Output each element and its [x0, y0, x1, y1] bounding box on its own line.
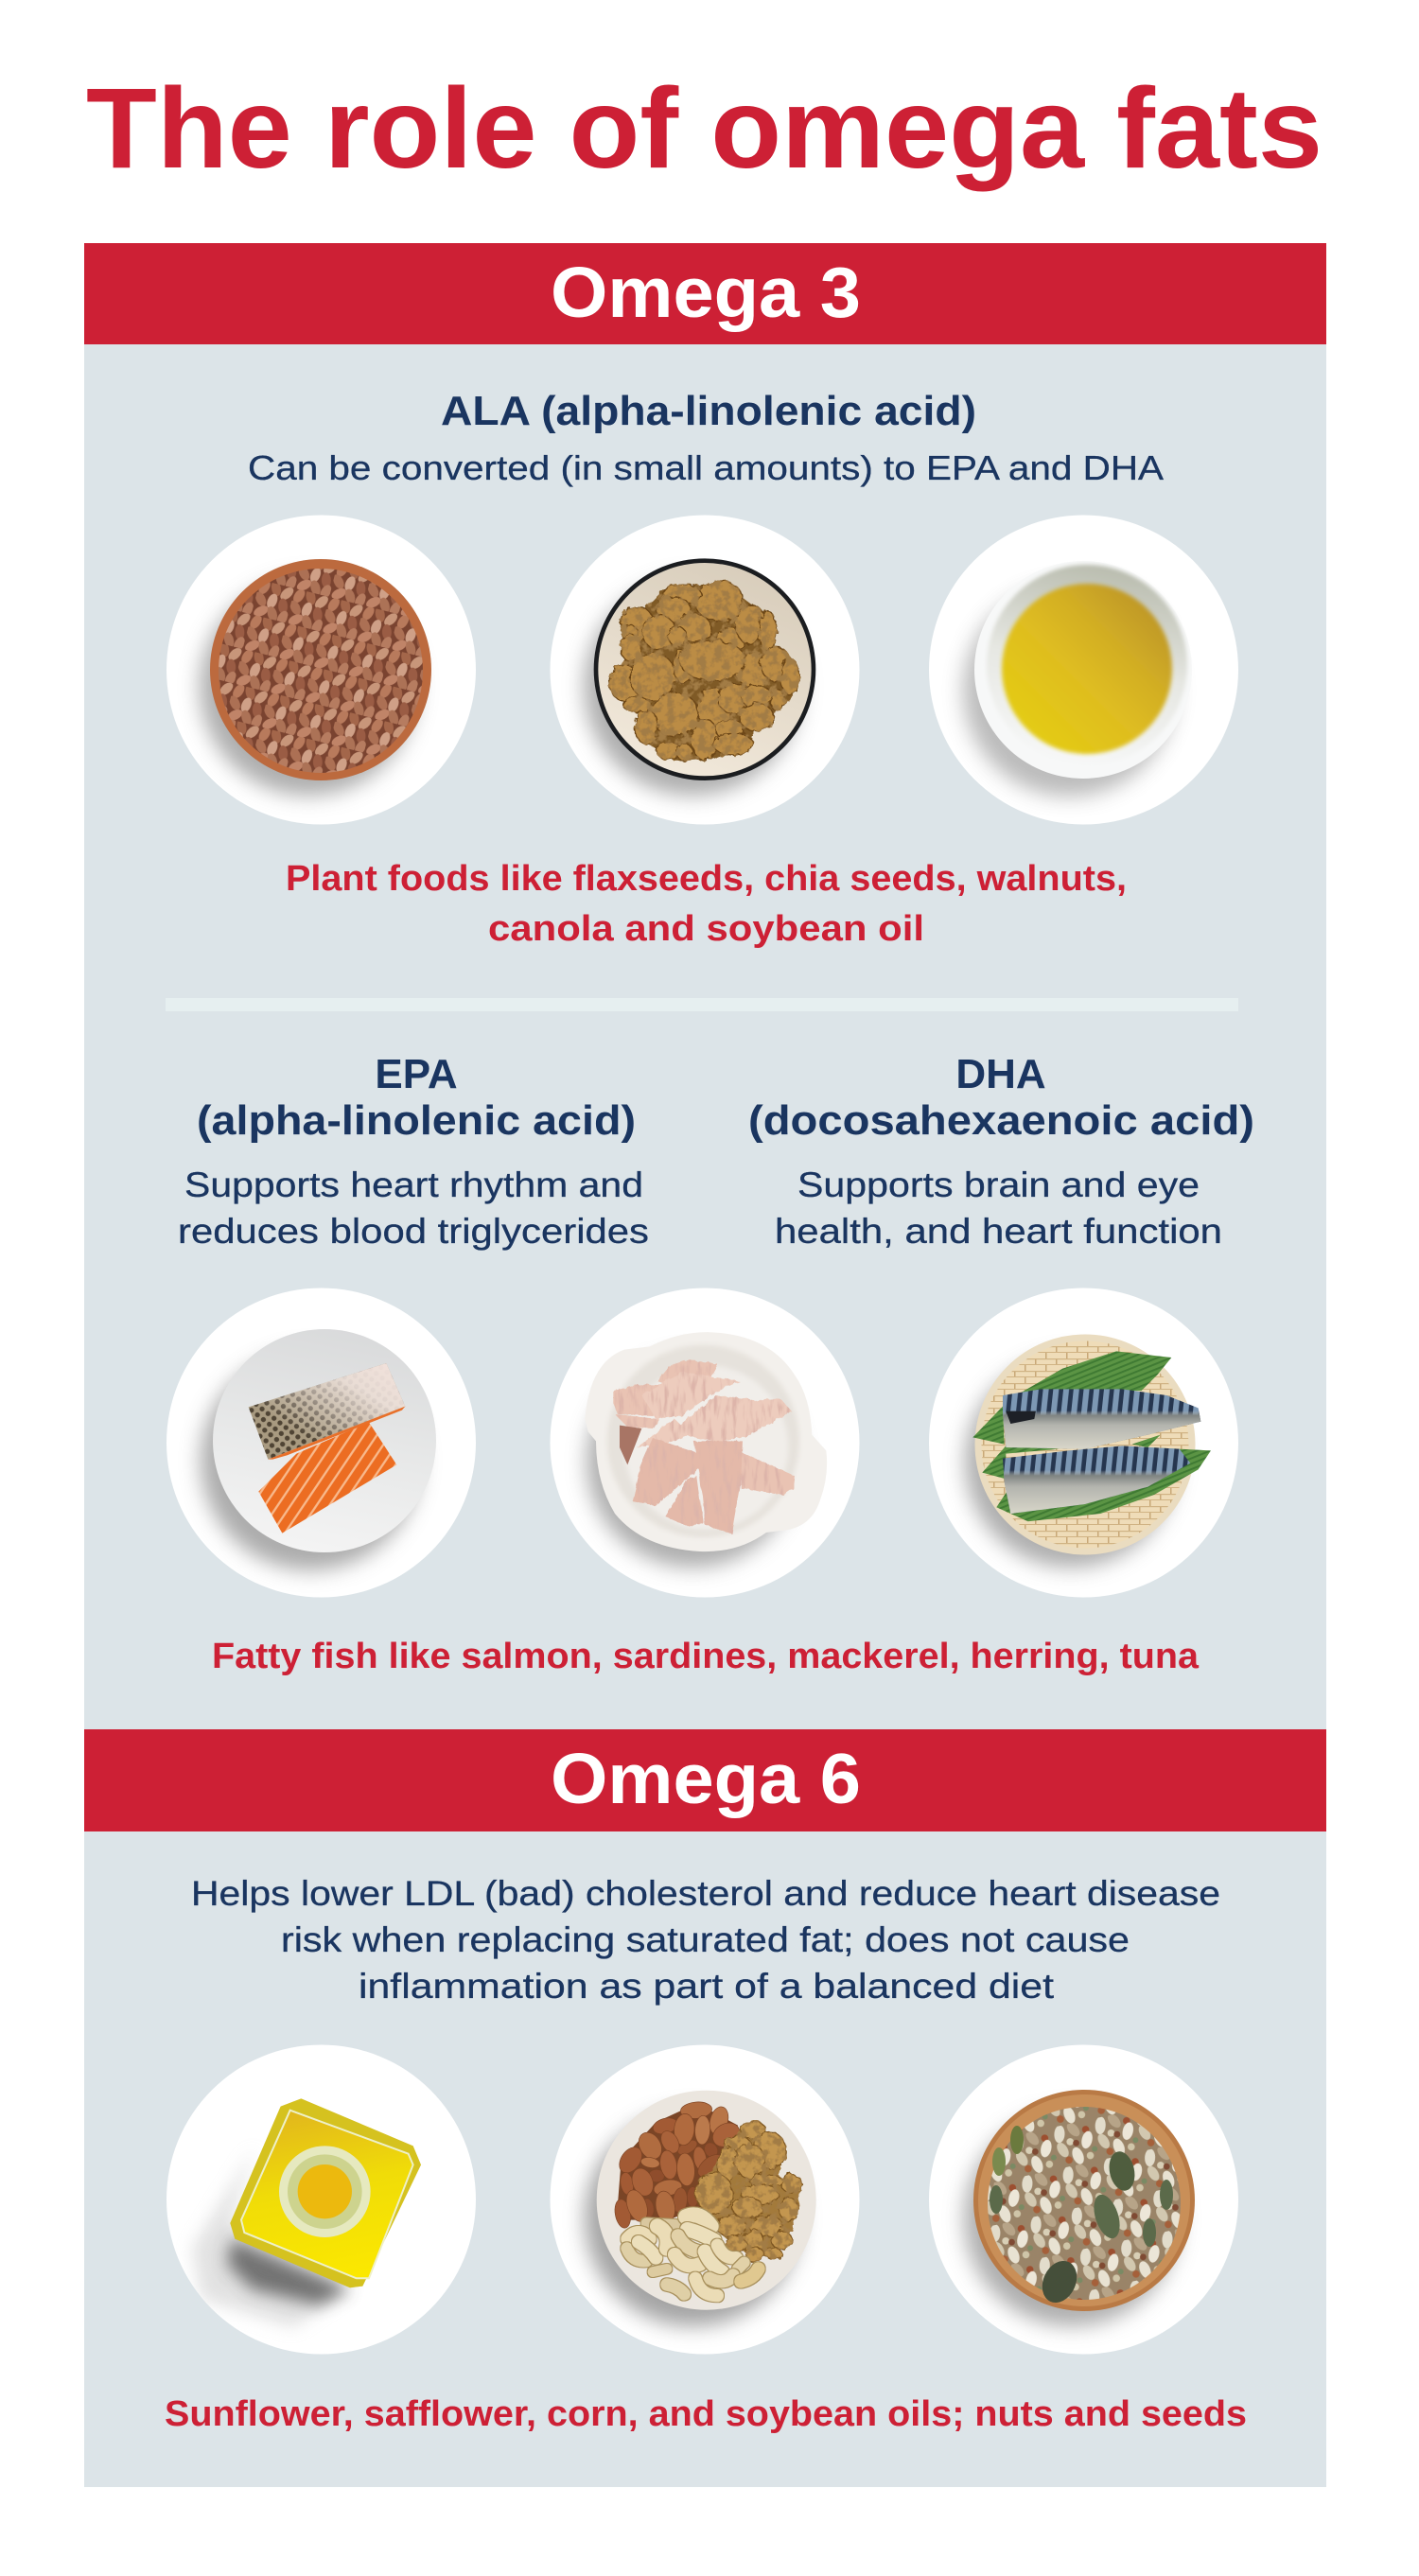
heading: DHA: [748, 1051, 1254, 1144]
heading: DHA: DHA: [955, 1051, 1046, 1097]
icon: oil in white dish: [929, 515, 1238, 825]
text: omega 6 description: Helps lower LDL (bad) cholesterol and reduce heart disease: [191, 1874, 1220, 1913]
heading: ALA: ALA (alpha-linolenic acid): [441, 388, 976, 434]
text: DHA description: [775, 1165, 1222, 1251]
icon: mackerel on bamboo tray: [929, 1288, 1238, 1597]
heading: EPA: (alpha-linolenic acid): [197, 1097, 636, 1144]
band: omega 3 header: [84, 243, 1326, 344]
text: EPA description: [178, 1165, 649, 1251]
cashews: [627, 2215, 759, 2296]
icon: walnuts in black-rim bowl: [551, 515, 859, 825]
heading: EPA: EPA: [375, 1051, 458, 1097]
text: omega 6 description: [191, 1874, 1220, 2006]
text: DHA description: health, and heart function: [775, 1212, 1222, 1251]
panel: light background: [84, 243, 1326, 2487]
text: DHA description: Supports brain and eye: [797, 1165, 1200, 1204]
text: plant foods: [286, 859, 1127, 949]
icon: seeds in wooden bowl: [929, 2045, 1238, 2354]
heading: EPA: [197, 1051, 636, 1144]
title: The role of omega fats: [86, 63, 1323, 192]
panel: omega 6: [84, 1729, 1326, 2434]
almonds: [613, 2101, 744, 2229]
text: plant foods: Plant foods like flaxseeds, chia seeds, walnuts,: [286, 859, 1127, 899]
band: omega 6 header: [84, 1729, 1326, 1831]
text: ALA description: Can be converted (in small amounts) to EPA and DHA: [248, 448, 1164, 487]
icon: flaxseeds in clay bowl: [166, 515, 476, 825]
walnuts: [696, 2121, 802, 2262]
panel: omega 3: [84, 243, 1326, 1676]
text: omega 6 description: inflammation as part of a balanced diet: [359, 1967, 1055, 2006]
band: omega 3 header: Omega 3: [551, 253, 861, 332]
icon: oil bottle from above: [166, 2045, 476, 2354]
text: plant foods: canola and soybean oil: [488, 909, 924, 949]
icon: mixed nuts on plate: [551, 2045, 859, 2354]
icon: salmon on plate: [166, 1288, 476, 1597]
band: omega 6 header: Omega 6: [551, 1739, 861, 1818]
text: omega 6 food sources: Sunflower, safflower, corn, and soybean oils; nuts and seeds: [165, 2394, 1247, 2434]
heading: DHA: (docosahexaenoic acid): [748, 1097, 1254, 1144]
icon: tuna in white dish: [551, 1288, 859, 1597]
text: omega 6 description: risk when replacing saturated fat; does not cause: [281, 1920, 1130, 1959]
text: fatty fish: Fatty fish like salmon, sardines, mackerel, herring, tuna: [212, 1637, 1200, 1676]
text: EPA description: reduces blood triglycerides: [178, 1212, 649, 1251]
text: EPA description: Supports heart rhythm and: [184, 1165, 643, 1204]
